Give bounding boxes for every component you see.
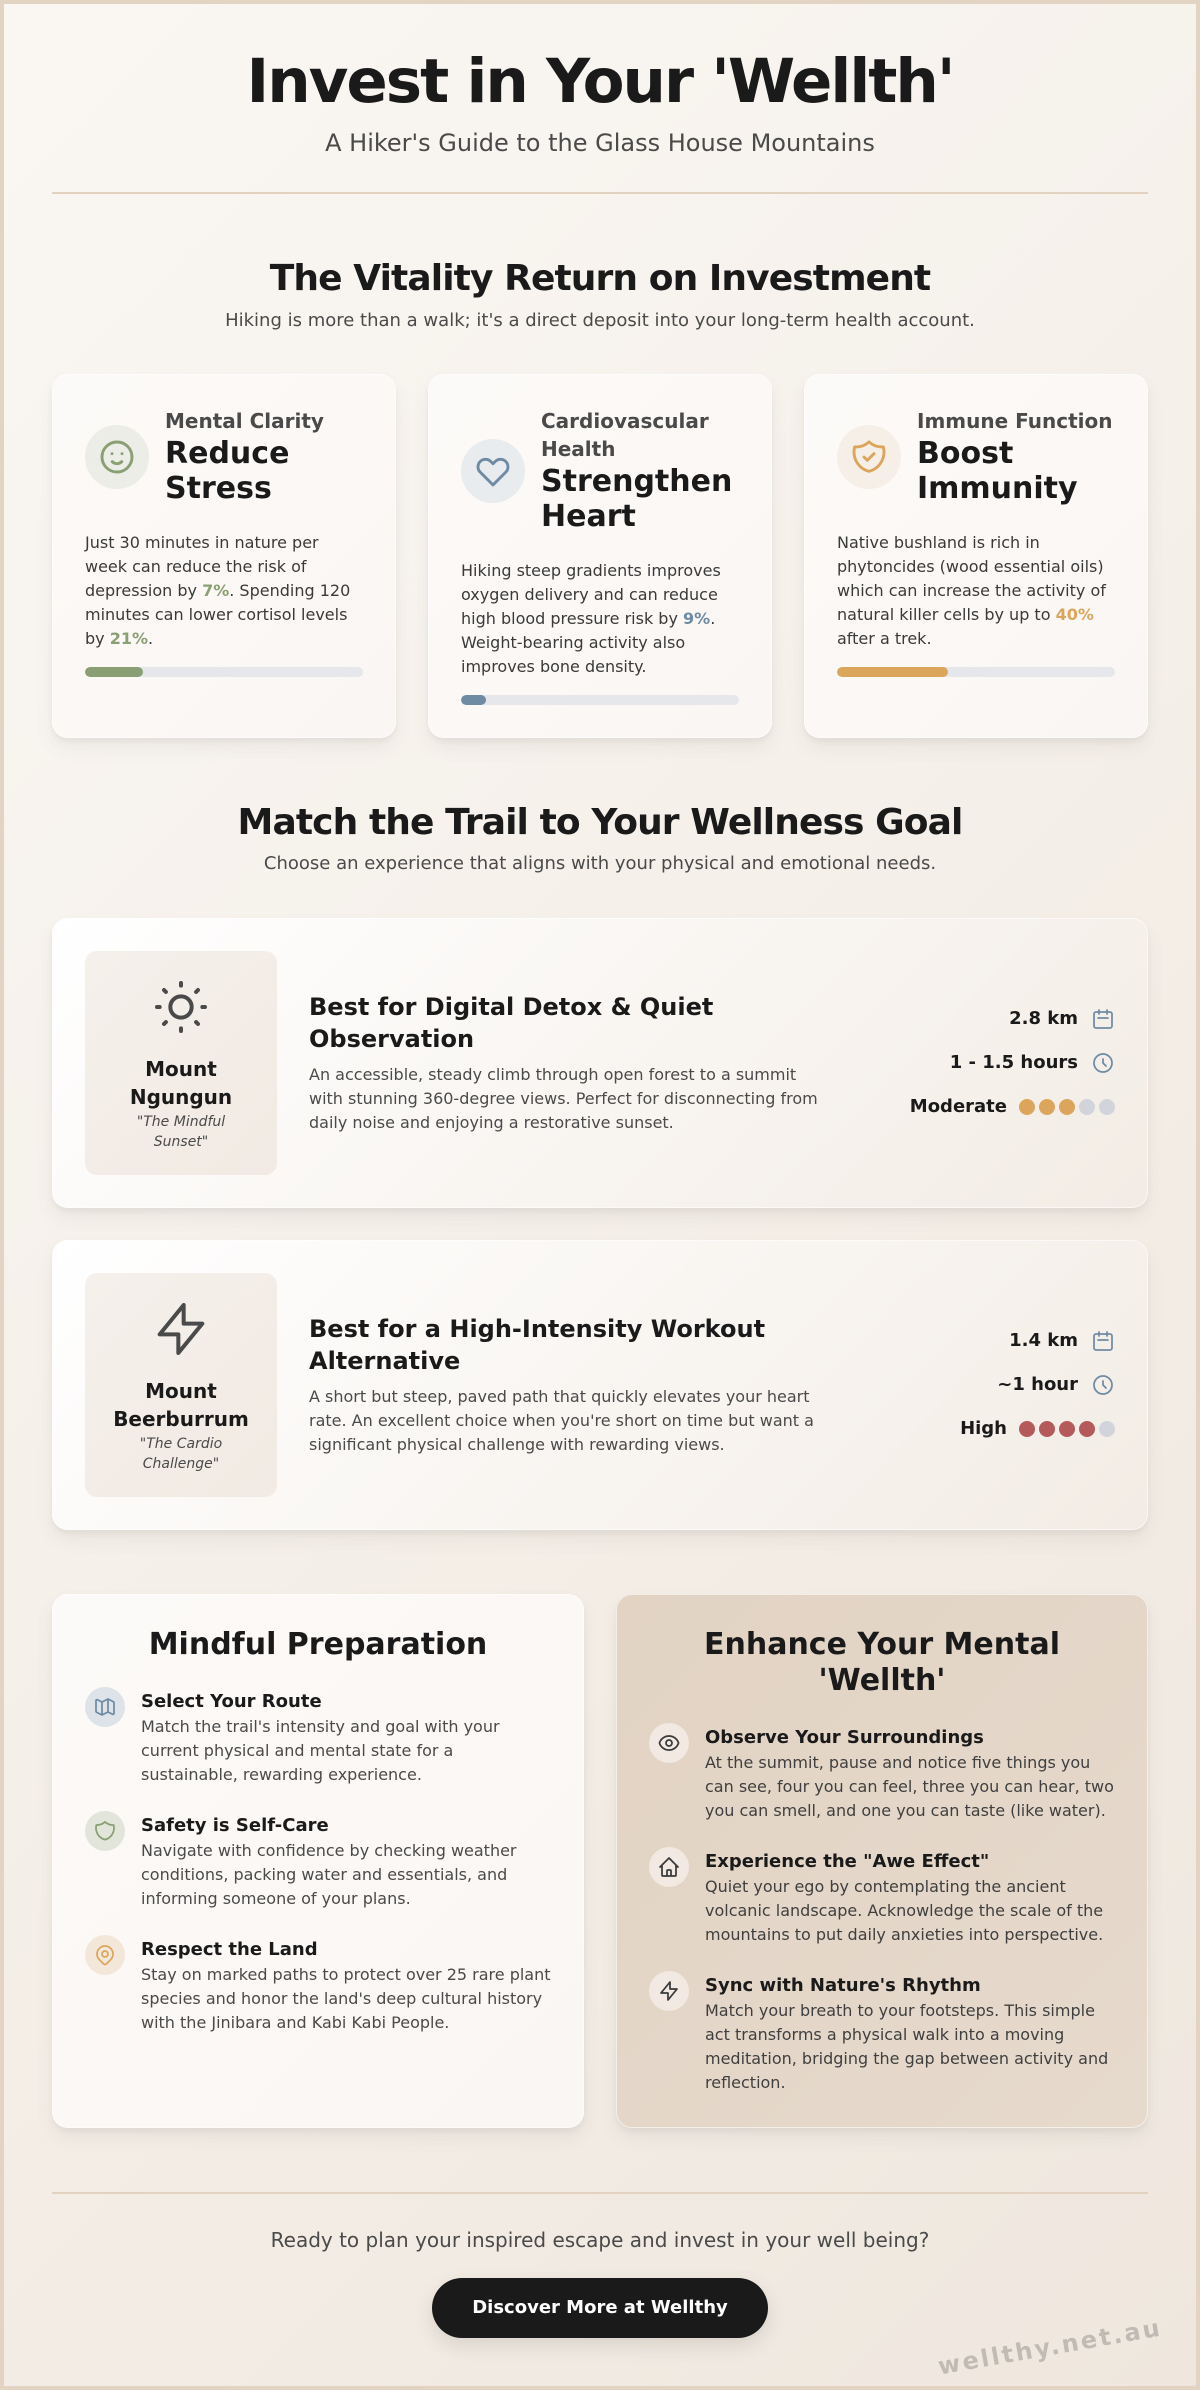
button: discover more xyxy=(432,2278,768,2338)
mountain tagline: "The Mindful xyxy=(137,1114,225,1130)
category label: Mental Clarity xyxy=(165,409,324,433)
item text xyxy=(705,2001,1108,2092)
item text xyxy=(141,1841,517,1908)
panel heading: 'Wellth' xyxy=(818,1663,946,1698)
trail description: with stunning 360-degree views. Perfect for disconnecting from xyxy=(309,1089,818,1108)
trail description: A short but steep, paved path that quickly elevates your heart xyxy=(309,1387,810,1406)
difficulty dots 4 of 5 xyxy=(1019,1421,1115,1437)
icon: shield check xyxy=(837,425,901,489)
progress bar 40% xyxy=(837,667,1115,677)
item text: conditions, packing water and essentials, and xyxy=(141,1865,507,1884)
card body: Just 30 minutes in nature per xyxy=(85,533,319,552)
mountain tagline: "The Cardio xyxy=(140,1436,222,1452)
stat: distance: 1.4 km xyxy=(1009,1330,1078,1351)
card body: Weight-bearing activity also xyxy=(461,633,685,652)
card body: by 21%. xyxy=(85,629,153,648)
card body: high blood pressure risk by 9%. xyxy=(461,609,715,628)
card title: Immunity xyxy=(917,471,1078,506)
item text xyxy=(705,1753,1114,1820)
panel: enhance your mental wellth xyxy=(616,1594,1148,2128)
mountain badge xyxy=(85,1273,277,1497)
trail description xyxy=(309,1065,818,1132)
mountain name xyxy=(113,1379,249,1431)
difficulty dots 3 of 5 xyxy=(1019,1099,1115,1115)
trail goal: Best for Digital Detox & Quiet xyxy=(309,993,713,1021)
trail description: daily noise and enjoying a restorative sunset. xyxy=(309,1113,674,1132)
card body: phytoncides (wood essential oils) xyxy=(837,557,1104,576)
mountain tagline: Challenge" xyxy=(143,1456,219,1472)
item text: you can smell, and one you can taste (like water). xyxy=(705,1801,1106,1820)
item text: with the Jinibara and Kabi Kabi People. xyxy=(141,2013,449,2032)
item title: Safety is Self-Care xyxy=(141,1815,329,1836)
card body: Hiking steep gradients improves xyxy=(461,561,721,580)
mountain name xyxy=(130,1057,232,1109)
mountain tagline: Sunset" xyxy=(154,1134,208,1150)
panel: mount beerburrum trail xyxy=(52,1240,1148,1530)
trail description: An accessible, steady climb through open forest to a summit xyxy=(309,1065,796,1084)
item title: Sync with Nature's Rhythm xyxy=(705,1975,981,1996)
panel: mount ngungun trail xyxy=(52,918,1148,1208)
mountain tagline xyxy=(140,1436,222,1472)
panel: boost immunity card xyxy=(804,374,1148,738)
item text xyxy=(141,1965,551,2032)
item text: Match the trail's intensity and goal with your xyxy=(141,1717,500,1736)
card body: oxygen delivery and can reduce xyxy=(461,585,718,604)
card title: Strengthen xyxy=(541,464,732,499)
card body: after a trek. xyxy=(837,629,932,648)
item text: can see, four you can feel, three you can hear, two xyxy=(705,1777,1114,1796)
icon: shield xyxy=(85,1811,125,1851)
mountain badge xyxy=(85,951,277,1175)
card body: Native bushland is rich in xyxy=(837,533,1040,552)
item text: Quiet your ego by contemplating the ancient xyxy=(705,1877,1066,1896)
item title: Select Your Route xyxy=(141,1691,322,1712)
progress bar 9% xyxy=(461,695,739,705)
item text: sustainable, rewarding experience. xyxy=(141,1765,422,1784)
stat: duration: 1 - 1.5 hours xyxy=(950,1052,1078,1073)
stat: difficulty: High xyxy=(960,1418,1007,1439)
trail goal: Observation xyxy=(309,1025,474,1053)
heading: vitality return: The Vitality Return on Investment xyxy=(270,258,930,299)
trail goal xyxy=(309,993,713,1053)
icon: eye xyxy=(649,1723,689,1763)
item title: Experience the "Awe Effect" xyxy=(705,1851,989,1872)
trail description xyxy=(309,1387,814,1454)
mountain name: Mount xyxy=(145,1057,217,1081)
card title xyxy=(541,464,732,534)
category label: Immune Function xyxy=(917,409,1113,433)
card body: improves bone density. xyxy=(461,657,646,676)
panel: mindful preparation xyxy=(52,1594,584,2128)
category label: Health xyxy=(541,437,615,461)
card title: Reduce xyxy=(165,436,289,471)
icon: map xyxy=(85,1687,125,1727)
icon: calendar xyxy=(1093,1009,1113,1029)
panel: strengthen heart card xyxy=(428,374,772,738)
item text: meditation, bridging the gap between activity and xyxy=(705,2049,1108,2068)
card body xyxy=(837,533,1106,648)
icon: clock xyxy=(1093,1053,1113,1073)
item text xyxy=(141,1717,500,1784)
item text xyxy=(705,1877,1103,1944)
item text: Stay on marked paths to protect over 25 rare plant xyxy=(141,1965,551,1984)
trail description: significant physical challenge with rewarding views. xyxy=(309,1435,725,1454)
card title: Stress xyxy=(165,471,272,506)
item text: Navigate with confidence by checking weather xyxy=(141,1841,517,1860)
item text: At the summit, pause and notice five things you xyxy=(705,1753,1090,1772)
panel heading: Mindful Preparation xyxy=(149,1627,487,1662)
item text: volcanic landscape. Acknowledge the scale of the xyxy=(705,1901,1103,1920)
category label: Cardiovascular xyxy=(541,409,709,433)
stat: distance: 2.8 km xyxy=(1009,1008,1078,1029)
card title: Heart xyxy=(541,499,636,534)
heading: match the trail: Match the Trail to Your Wellness Goal xyxy=(238,802,962,843)
title: Invest in Your 'Wellth' xyxy=(246,46,954,117)
panel: reduce stress card xyxy=(52,374,396,738)
watermark: wellthy.net.au xyxy=(936,2314,1164,2380)
card title: Boost xyxy=(917,436,1013,471)
card body: minutes can lower cortisol levels xyxy=(85,605,347,624)
card body xyxy=(84,533,350,648)
icon: calendar xyxy=(1093,1331,1113,1351)
stat: duration: ~1 hour xyxy=(997,1374,1078,1395)
trail goal: Alternative xyxy=(309,1347,460,1375)
icon: location pin xyxy=(85,1935,125,1975)
item title: Respect the Land xyxy=(141,1939,318,1960)
section intro: vitality return: Hiking is more than a walk; it's a direct deposit into your long-term health account. xyxy=(225,310,975,331)
icon: clock xyxy=(1093,1375,1113,1395)
card body: natural killer cells by up to 40% xyxy=(837,605,1094,624)
icon: heart xyxy=(461,439,525,503)
subtitle: A Hiker's Guide to the Glass House Mountains xyxy=(325,129,875,157)
mountain name: Mount xyxy=(145,1379,217,1403)
mountain name: Beerburrum xyxy=(113,1407,249,1431)
card title xyxy=(165,436,289,506)
panel heading xyxy=(704,1627,1060,1698)
card body: week can reduce the risk of xyxy=(85,557,307,576)
button: discover more: Discover More at Wellthy xyxy=(472,2297,728,2318)
icon: sun xyxy=(155,981,207,1033)
trail goal xyxy=(309,1315,765,1375)
card body xyxy=(461,561,721,676)
trail description: rate. An excellent choice when you're short on time but want a xyxy=(309,1411,814,1430)
item text: current physical and mental state for a xyxy=(141,1741,453,1760)
category label xyxy=(541,409,709,461)
card title xyxy=(917,436,1078,506)
card body: depression by 7%. Spending 120 xyxy=(85,581,350,600)
icon: home xyxy=(649,1847,689,1887)
item text: mountains to put daily anxieties into perspective. xyxy=(705,1925,1103,1944)
mountain tagline xyxy=(137,1114,225,1150)
icon: smile xyxy=(85,425,149,489)
item text: act transforms a physical walk into a moving xyxy=(705,2025,1064,2044)
item text: Match your breath to your footsteps. This simple xyxy=(705,2001,1095,2020)
progress bar 21% xyxy=(85,667,363,677)
stat: difficulty: Moderate xyxy=(910,1096,1007,1117)
item text: reflection. xyxy=(705,2073,786,2092)
card body: which can increase the activity of xyxy=(837,581,1106,600)
trail goal: Best for a High-Intensity Workout xyxy=(309,1315,765,1343)
panel heading: Enhance Your Mental xyxy=(704,1627,1060,1662)
closing question: Ready to plan your inspired escape and invest in your well being? xyxy=(271,2228,929,2252)
mountain name: Ngungun xyxy=(130,1085,232,1109)
item text: species and honor the land's deep cultural history xyxy=(141,1989,542,2008)
item title: Observe Your Surroundings xyxy=(705,1727,984,1748)
icon: lightning bolt xyxy=(649,1971,689,2011)
section intro: match the trail: Choose an experience that aligns with your physical and emotional needs. xyxy=(264,853,936,874)
item text: informing someone of your plans. xyxy=(141,1889,411,1908)
icon: lightning bolt xyxy=(158,1303,204,1355)
